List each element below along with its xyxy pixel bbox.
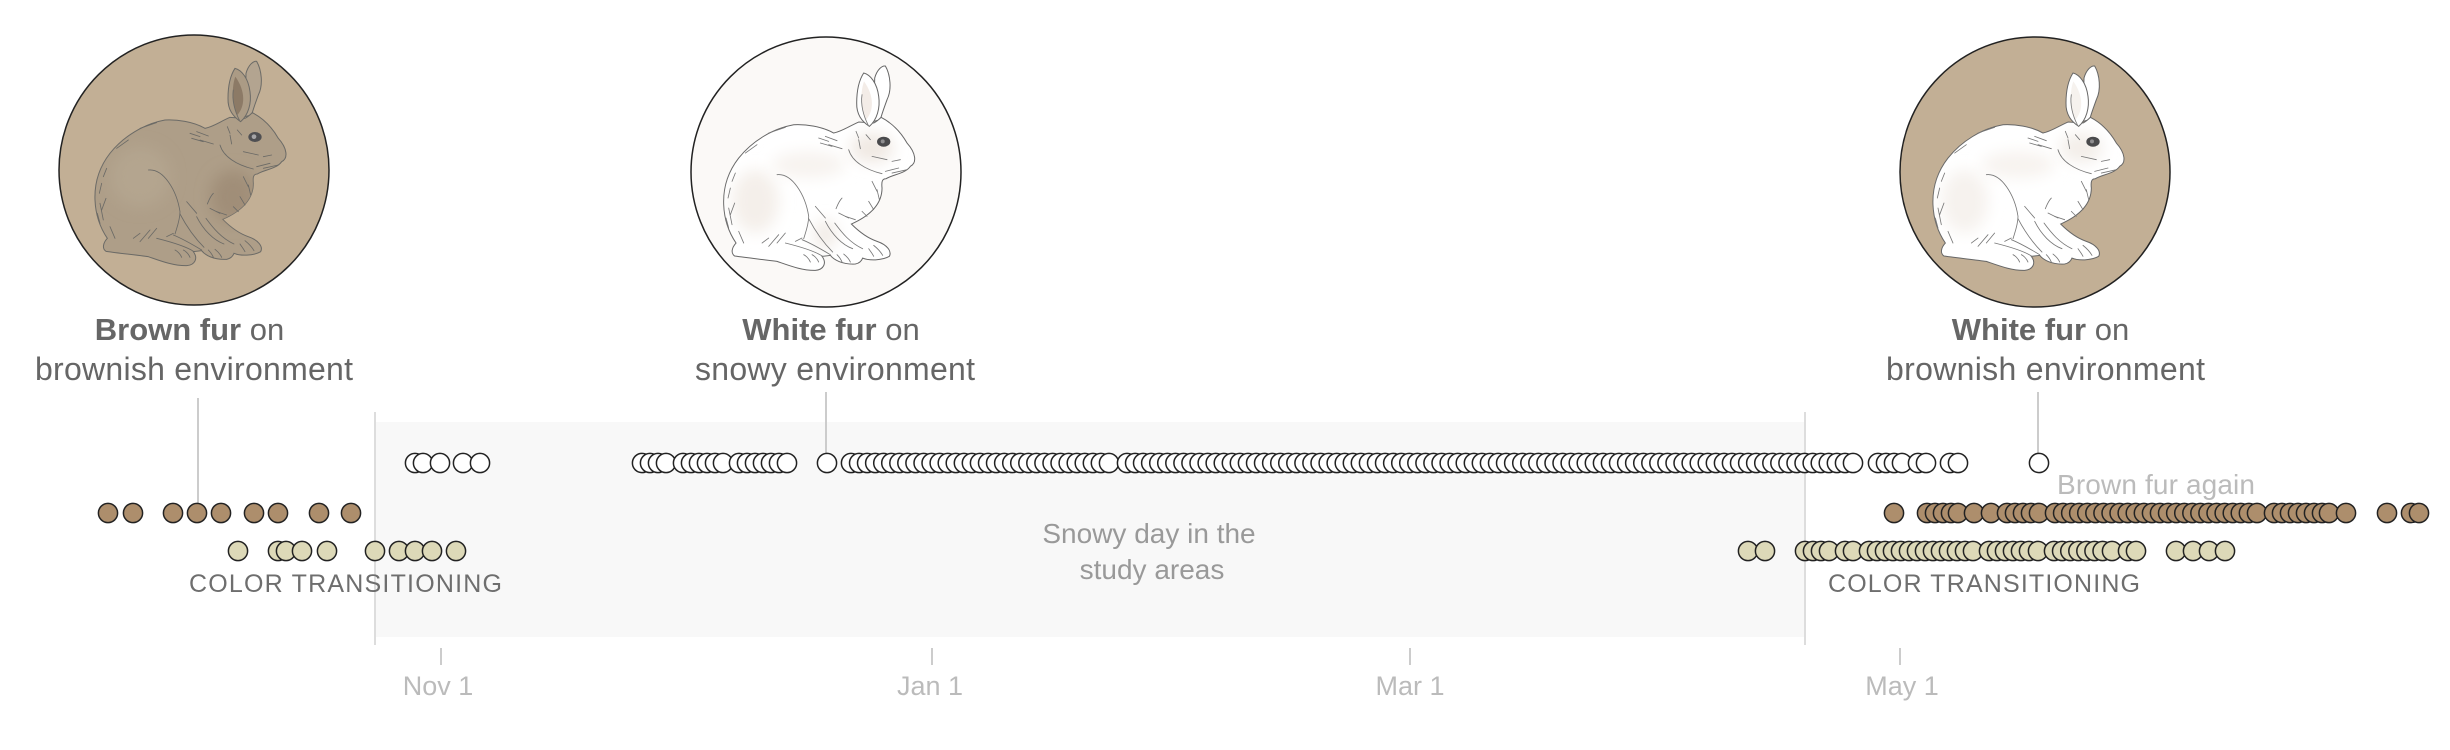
heading: white fur on brownish environment: White fur on — [1952, 312, 2129, 347]
panel: white hare on brownish environment — [1900, 37, 2170, 307]
axis label: May 1: May 1 — [1865, 671, 1939, 701]
heading line: brownish environment, right: brownish environment — [1886, 351, 2205, 387]
dot row: white fur — [405, 453, 2049, 473]
snowy period band — [375, 412, 1805, 645]
heading line: brownish environment: brownish environment — [35, 351, 353, 387]
panel: brown hare on brownish environment — [59, 35, 329, 305]
icon: white hare on snow — [724, 66, 915, 270]
axis label: Jan 1: Jan 1 — [897, 671, 963, 701]
callout leader lines — [198, 392, 2038, 508]
axis: date ticks — [441, 648, 1900, 665]
heading: white fur on snowy environment: White fur on — [742, 312, 920, 347]
heading: brown fur on brownish environment: Brown fur on — [95, 312, 284, 347]
panel: white hare on snowy environment — [691, 37, 961, 307]
label: snowy day in the study areas: Snowy day in the — [1042, 518, 1256, 549]
label: color transitioning, spring: COLOR TRANSITIONING — [1828, 570, 2140, 598]
heading line: snowy environment: snowy environment — [695, 351, 975, 387]
axis label: Mar 1: Mar 1 — [1375, 671, 1445, 701]
axis label: Nov 1: Nov 1 — [403, 671, 473, 701]
label: color transitioning, fall: COLOR TRANSITIONING — [189, 570, 502, 598]
label: brown fur again: Brown fur again — [2057, 469, 2255, 500]
dot row: brown fur — [98, 503, 2429, 523]
icon: brown hare — [95, 61, 286, 266]
label: snowy day in the study areas: study areas — [1080, 554, 1224, 585]
dot row: color transitioning — [228, 541, 2235, 561]
icon: white hare on brown — [1933, 66, 2124, 270]
